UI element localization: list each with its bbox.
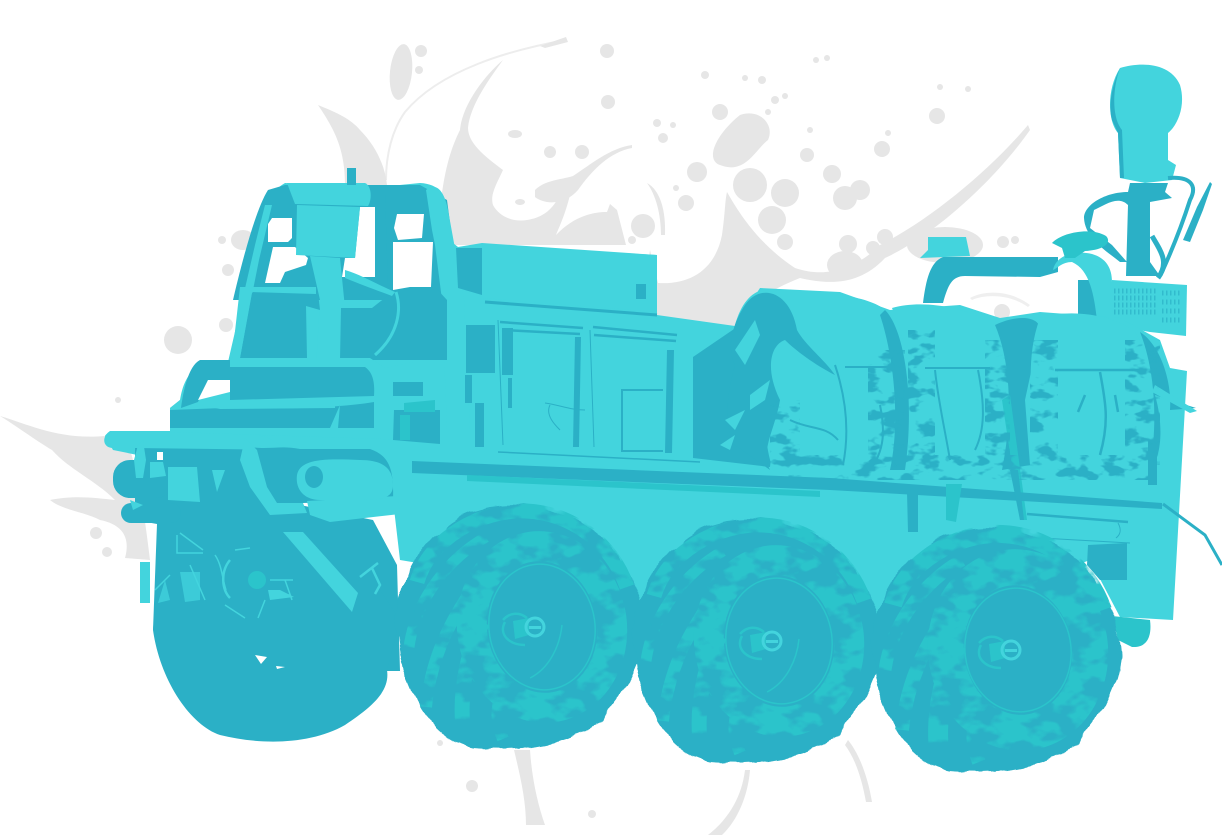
strap between bags [995,318,1040,470]
hood dark panel [230,367,374,400]
equipment panels [465,320,775,467]
front suspension details [140,532,380,669]
bag 2 [892,304,1006,476]
hub [979,637,1020,668]
mast and cables [1084,183,1172,276]
rim [718,571,840,711]
sensor box [296,205,360,258]
cargo box [456,245,657,315]
antenna stub [347,168,356,185]
rear sensor mast with camera [1084,65,1212,278]
wheel 3 [873,528,1121,772]
tread patches [646,525,864,753]
rim [957,581,1079,719]
inner block details [393,382,440,444]
vehicle body and cargo base [105,183,1187,640]
dark gap 1-2 [880,310,909,470]
lower bumper bars [113,460,181,523]
top cap [287,183,371,206]
curved bumper arm [240,438,400,522]
seat panel [240,293,320,358]
interior dark [340,287,447,360]
cargo bags [720,290,1197,520]
rear hitch block [1112,616,1150,647]
wheel 1 [397,505,645,749]
tread patches [885,534,1103,762]
front bumper bar [104,431,290,502]
mesh sensor box [1112,280,1187,336]
dark gap before bags [693,327,775,467]
rack dark arch [923,257,1058,303]
tire [634,519,882,763]
icon: antenna puck left [920,237,970,258]
rim [481,557,603,697]
icon: GPS puck right [1052,231,1108,258]
rack light arc [1053,253,1116,320]
hood and windshield arch [170,358,440,444]
icon: camera head [1110,65,1182,183]
flatbed rails [412,461,1222,580]
tow hitch eye [297,459,393,500]
column [310,256,370,368]
hub [503,614,562,678]
front dark chassis [135,447,400,700]
cab windows [268,218,292,242]
cage dark frame [233,185,453,300]
wheel 2 [634,519,882,763]
bag 1 [734,290,908,479]
tire [397,505,645,749]
tire [873,528,1121,772]
left arch [181,360,230,408]
front wheel [153,590,400,742]
hub [740,628,799,692]
bag mottling [770,330,1160,480]
rear roll bar rack [920,231,1187,336]
tread patches [409,511,627,739]
cab roll cage [228,168,470,430]
bag 3 [1030,313,1154,476]
right curved post [426,187,470,430]
